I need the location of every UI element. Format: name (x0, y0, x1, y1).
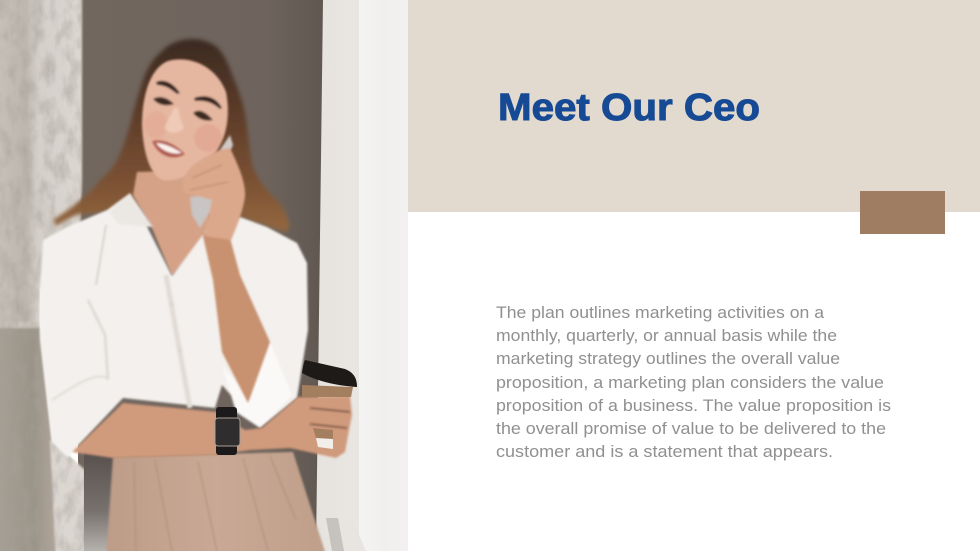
accent: brown rectangle (860, 190, 945, 234)
eyes (153, 97, 174, 105)
panel: beige header (408, 0, 980, 212)
backdrop: concrete column (0, 0, 85, 551)
text block: CEO description: The plan outlines marketing activities on a (496, 304, 825, 322)
woman: folded forearm and hand (72, 396, 352, 458)
woman: skirt (106, 452, 328, 551)
photo: CEO talking on the phone (0, 0, 408, 551)
woman: hair (53, 39, 289, 232)
text block: CEO description: monthly, quarterly, or annual basis while the (496, 327, 837, 345)
icon: smart watch (215, 407, 240, 455)
woman: white shirt (40, 193, 308, 458)
backdrop: dark wall (78, 0, 328, 551)
text block: CEO description: the overall promise of value to be delivered to the (496, 420, 886, 438)
eyebrows (156, 81, 180, 94)
text block: CEO description: proposition, a marketing plan considers the value (496, 374, 884, 392)
woman: face (142, 59, 228, 180)
cheek shading (144, 111, 168, 139)
nose (165, 108, 184, 133)
woman: neck (133, 170, 212, 276)
mouth (152, 140, 185, 158)
backdrop: gap below arm (84, 452, 116, 551)
title: Meet Our Ceo (498, 87, 760, 129)
text block: CEO description: marketing strategy outlines the overall value (496, 350, 840, 368)
woman: raised arm and hand with phone (183, 135, 270, 403)
text block: CEO description: customer and is a statement that appears. (496, 443, 833, 461)
shirt folds and placket (166, 275, 190, 408)
text block: CEO description (496, 304, 891, 461)
object: coffee cup (302, 360, 357, 449)
backdrop: white window frame (316, 0, 408, 551)
text block: CEO description: proposition of a business. The value proposition is (496, 397, 891, 415)
